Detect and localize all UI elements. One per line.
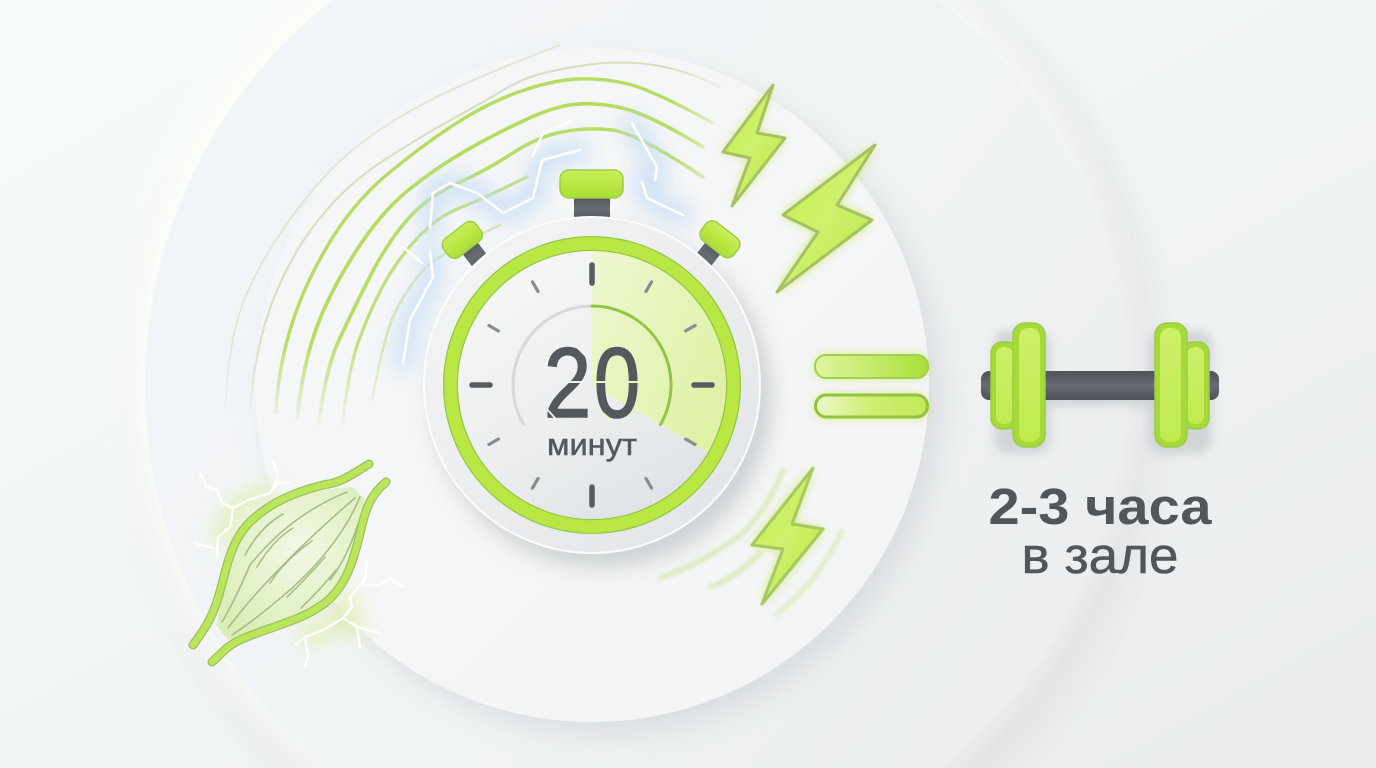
muscle fibers [222,492,364,635]
top crown button [560,170,623,223]
icon: muscle with sparks [193,460,402,667]
caption line 2: в зале [1022,527,1178,584]
elapsed 20 minute wedge [592,250,727,452]
minute ticks [472,265,712,505]
caption: 2-3 hours in the gym [988,478,1212,584]
muscle glow [218,493,357,637]
icon: small lightning bolt top [723,85,785,206]
right plates [1155,323,1209,447]
sparks [195,460,402,667]
energy waves [225,45,722,430]
lime ring [450,244,734,526]
upper tendon [193,464,369,645]
electric arcs around stopwatch [403,122,683,363]
dial face [456,249,728,521]
icon: dumbbell [981,323,1219,454]
caption line 1: 2-3 часа [988,478,1212,535]
inner progress arc [513,306,671,424]
lower tendon [212,482,386,662]
muscle body [217,487,365,640]
label: minutes: минут [547,427,637,462]
equals bottom bar [816,395,928,417]
glass bezel [424,217,760,553]
digital readout 20 [544,327,640,439]
icon: large lightning bolt [777,145,875,292]
stopwatch [424,170,772,568]
digital readout 20: 2 [544,327,591,438]
equals top bar [815,355,928,378]
digital readout 20: 0 [594,328,640,439]
equals sign [815,355,928,418]
right side button [682,218,743,280]
stopwatch shadow [432,228,772,568]
left plates [991,323,1045,447]
left side button [439,218,500,281]
icon: lower lightning bolt with motion lines [660,468,842,615]
main white disc [255,48,941,734]
dumbbell bar [981,371,1219,400]
